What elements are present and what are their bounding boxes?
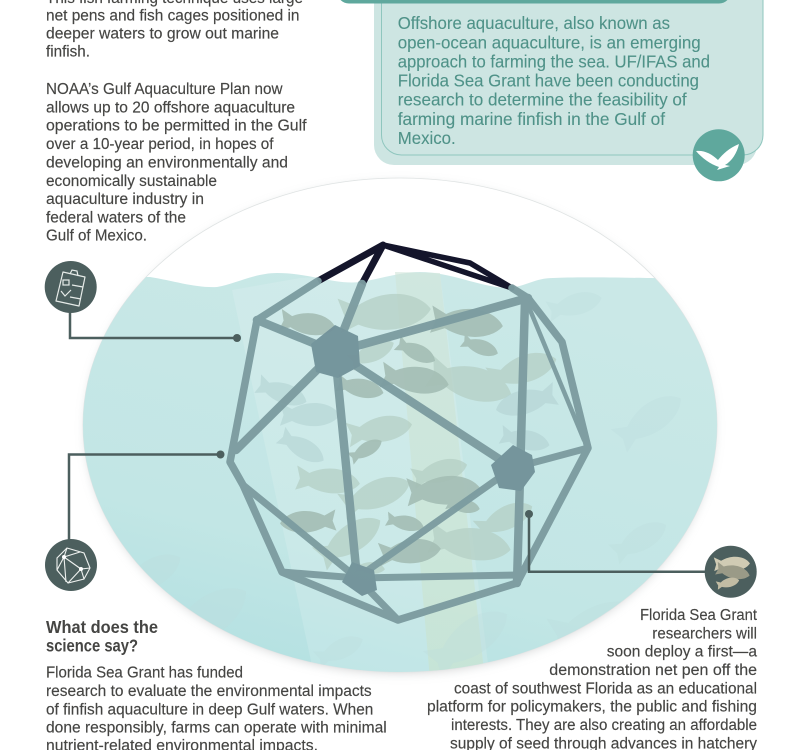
shadow of the ocean ellipse (88, 185, 712, 671)
text block: science findings (46, 665, 387, 750)
text block: science findings: Florida Sea Grant has funded (46, 665, 243, 682)
net pen cage below water (230, 281, 588, 620)
panel: intro text left: aquaculture industry in (46, 191, 204, 208)
cage hub bottom (342, 562, 377, 596)
panel: offshore aquaculture definition box (337, 0, 763, 165)
text block: science findings: of finfish aquaculture in deep Gulf waters. When (46, 701, 373, 718)
icon: seabird badge (693, 129, 745, 181)
text block: demonstration net pen: platform for policymakers, the public and fishing (427, 699, 757, 716)
cage hub upper left (311, 325, 360, 378)
callout: cage icon and leader (45, 450, 224, 591)
panel: offshore aquaculture definition box: research to determine the feasibility of (398, 90, 687, 110)
panel: intro text left: operations to be permitted in the Gulf (46, 118, 307, 135)
cage hub right (491, 445, 535, 491)
water body (60, 272, 740, 680)
panel: intro text left: deeper waters to grow out marine (46, 26, 279, 43)
panel: offshore aquaculture definition box: open-ocean aquaculture, is an emerging (398, 32, 701, 52)
text block: demonstration net pen: researchers will (652, 625, 757, 642)
panel: offshore aquaculture definition box: Florida Sea Grant have been conducting (398, 71, 699, 91)
text block: demonstration net pen: coast of southwest Florida as an educational (454, 680, 757, 697)
heading: what does the science say (46, 617, 158, 656)
fish school inside cage (254, 291, 560, 575)
heading: what does the science say: What does the (46, 617, 158, 637)
panel: intro text left (46, 0, 307, 245)
text block: demonstration net pen: interests. They are also creating an affordable (451, 717, 757, 734)
panel: intro text left: Gulf of Mexico. (46, 228, 147, 245)
panel: intro text left: finfish. (46, 44, 90, 61)
callout: clipboard icon and leader (45, 261, 241, 342)
panel: ocean ellipse (60, 178, 740, 680)
panel: intro text left: net pens and fish cages positioned in (46, 8, 300, 25)
text block: science findings: research to evaluate the environmental impacts (46, 683, 372, 700)
panel: offshore aquaculture definition box: approach to farming the sea. UF/IFAS and (398, 51, 710, 71)
panel: offshore aquaculture definition box: farming marine finfish in the Gulf of (398, 109, 665, 129)
text block: demonstration net pen: demonstration net pen off the (549, 662, 757, 679)
panel: intro text left: federal waters of the (46, 210, 186, 227)
panel: intro text left: allows up to 20 offshore aquaculture (46, 99, 295, 116)
green light beam (395, 272, 485, 680)
panel: intro text left: NOAA’s Gulf Aquaculture Plan now (46, 81, 283, 98)
callout: fish icon and leader (525, 510, 757, 598)
text block: science findings: done responsibly, farms can operate with minimal (46, 720, 387, 737)
panel: intro text left: developing an environmentally and (46, 154, 288, 171)
panel: offshore aquaculture definition box: Offshore aquaculture, also known as (398, 13, 670, 33)
faint outer fish and shapes (113, 287, 689, 680)
panel: offshore aquaculture definition box: Mexico. (398, 128, 456, 148)
text block: demonstration net pen: soon deploy a first—a (607, 644, 757, 661)
text block: demonstration net pen (427, 607, 758, 750)
panel: intro text left: over a 10-year period, in hopes of (46, 136, 274, 153)
light beam (288, 554, 488, 672)
panel: intro text left: economically sustainable (46, 173, 217, 190)
net pen cage above water (318, 245, 512, 288)
text block: demonstration net pen: Florida Sea Grant (640, 607, 758, 624)
heading: what does the science say: science say? (46, 636, 138, 656)
